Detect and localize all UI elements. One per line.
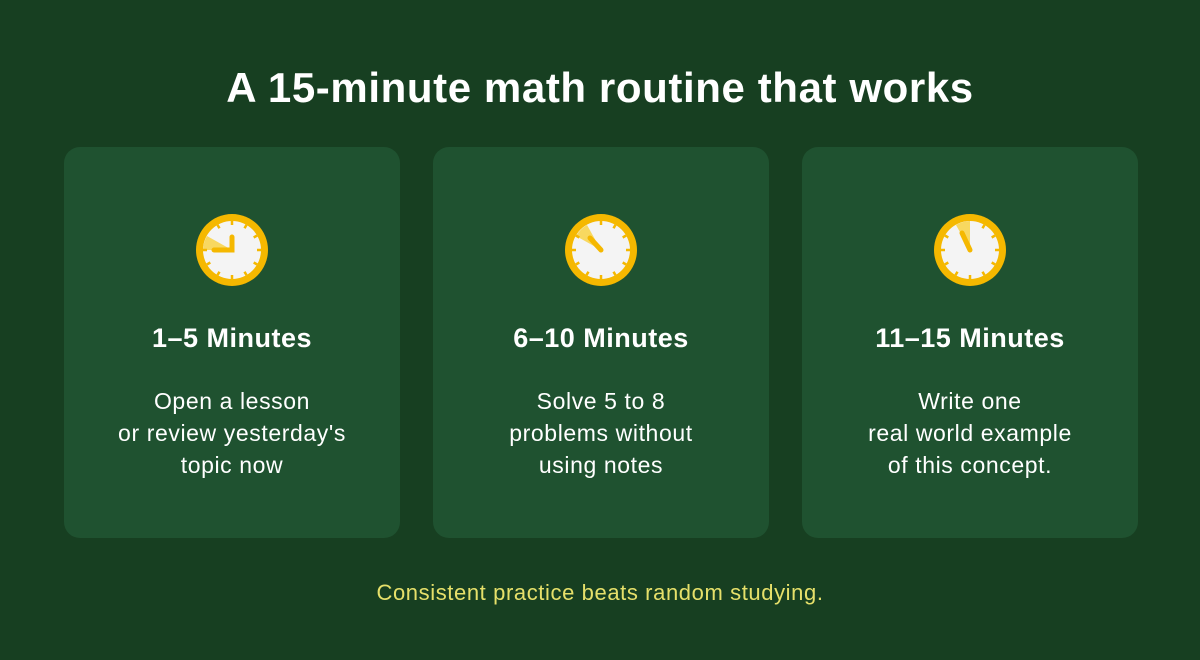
text: Write one <box>918 388 1022 414</box>
panel: 11-15 minutes <box>802 147 1138 538</box>
heading: 6–10 Minutes <box>513 323 689 353</box>
panel: 6-10 minutes <box>433 147 769 538</box>
text: topic now <box>181 452 283 478</box>
text: real world example <box>868 420 1072 446</box>
heading: 11–15 Minutes <box>875 323 1065 353</box>
footer: Consistent practice beats random studying. <box>376 580 824 605</box>
text: Solve 5 to 8 <box>537 388 665 414</box>
text: using notes <box>539 452 663 478</box>
text <box>868 388 1072 478</box>
text: problems without <box>509 420 693 446</box>
icon: clock <box>934 214 1006 286</box>
text <box>118 388 346 478</box>
text <box>509 388 693 478</box>
heading: 1–5 Minutes <box>152 323 312 353</box>
text: of this concept. <box>888 452 1052 478</box>
text: Open a lesson <box>154 388 310 414</box>
title: A 15-minute math routine that works <box>226 64 974 111</box>
icon: clock <box>196 214 268 286</box>
panel: 1-5 minutes <box>64 147 400 538</box>
text: or review yesterday's <box>118 420 346 446</box>
icon: clock <box>565 214 637 286</box>
